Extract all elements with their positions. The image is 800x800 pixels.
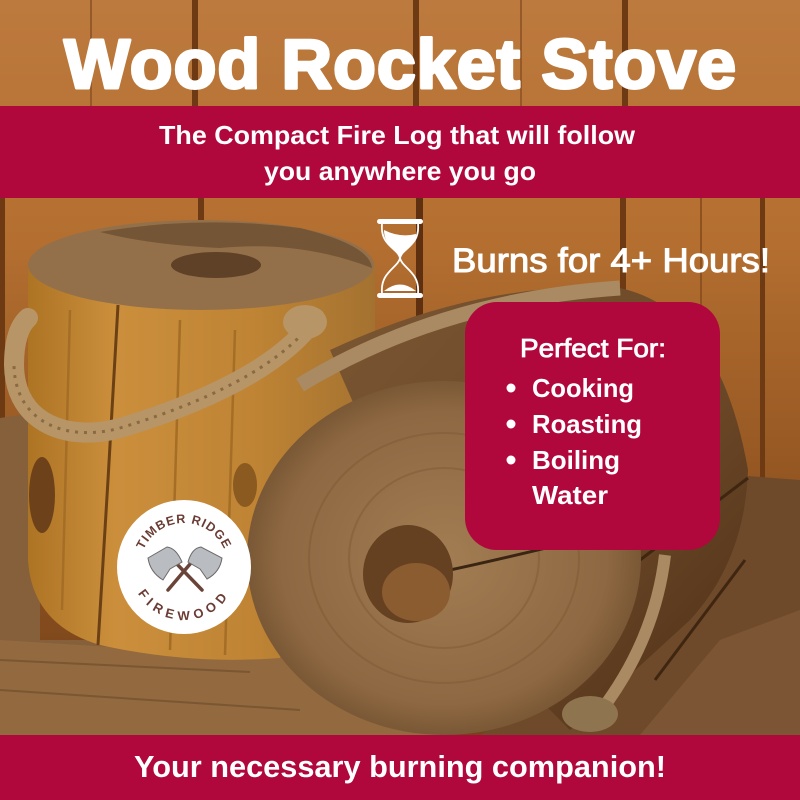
photo: upright log	[14, 220, 375, 660]
use list: Roasting	[532, 409, 642, 439]
hanging rope	[600, 555, 665, 712]
use list: Water	[532, 480, 608, 510]
center bore	[363, 525, 453, 623]
background: wooden floor	[0, 412, 800, 735]
hole in log top	[171, 252, 261, 278]
panel: perfect for	[465, 302, 720, 550]
side vent hole	[29, 457, 55, 533]
subtitle banner	[0, 106, 800, 198]
logo: Timber Ridge Firewood: TIMBER RIDGE	[136, 514, 232, 548]
use list: Cooking	[532, 373, 634, 403]
footer banner: Your necessary burning companion!	[134, 749, 666, 784]
panel heading: Perfect For:	[520, 333, 666, 363]
icon: hourglass	[377, 219, 423, 298]
use list: Boiling	[532, 445, 620, 475]
rope handle	[14, 318, 315, 433]
title: Wood Rocket Stove	[64, 25, 736, 103]
footer banner	[0, 735, 800, 800]
use list	[506, 373, 642, 510]
logo: Timber Ridge Firewood: FIREWOOD	[138, 588, 226, 620]
subtitle banner: The Compact Fire Log that will follow	[159, 120, 636, 150]
logo: Timber Ridge Firewood	[117, 500, 251, 634]
subtitle banner: you anywhere you go	[264, 156, 536, 186]
burn time text: Burns for 4+ Hours!	[452, 242, 770, 280]
log end grain	[247, 381, 641, 735]
photo: fallen log	[247, 287, 748, 735]
icon: crossed axes	[148, 547, 222, 590]
